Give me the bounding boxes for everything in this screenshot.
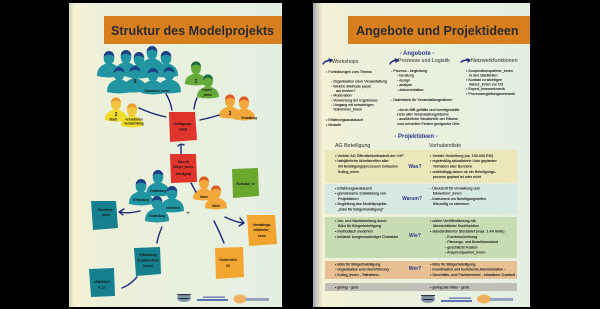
sticky note: Beteiligungsbeirat: beirat (179, 128, 187, 132)
logos (421, 294, 513, 304)
column: Workshops: - Welche Methode passt (331, 84, 371, 88)
column: Workshops (323, 59, 387, 127)
group: teal people at the Büro: Einbindung (150, 189, 166, 193)
sticky note: Einwohner_innen: Einwohner (97, 208, 113, 212)
sticky note: Evaluator_in (232, 168, 259, 198)
sticky note: Verwaltungsmitarbeiter_innen: Verwaltungs- (253, 223, 271, 227)
row: Wie: • Vor- und Nachbereitung durch (335, 219, 387, 223)
title banner: Struktur des Modelprojekts: Struktur des Modelprojekts (111, 24, 274, 38)
panel: Struktur des Modelprojekts poster (69, 3, 282, 307)
group: Stadt und Verwaltung yellow people: versammlung (124, 122, 144, 126)
row: Warum: frühzeitig zu erkennen (433, 202, 469, 206)
row: Warum: „Büro für Bürgerbeteiligung" (338, 208, 384, 212)
sticky note: Büro für Bürger_innenbeteiligung: Büro für (178, 160, 190, 164)
panel: Angebote und Projektideen poster (313, 3, 530, 307)
group: Expert_innen people: _innen (201, 93, 212, 97)
row: Wer (325, 261, 518, 279)
column: Workshops: - Moderation (331, 94, 352, 98)
sticky note: Fachbereich 60: Fachbereich (219, 258, 237, 262)
column: Prozesse und Logistik: - ausführliche Steckbriefe der Räume (397, 117, 458, 121)
column: Netzwerkfunktionen: • Expert_innennetzwerk (466, 87, 505, 91)
group: Interne orange people: intern (212, 204, 220, 208)
sticky note: Steuerung Quartiersebene: Kulsch (143, 264, 153, 268)
row: Warum (325, 184, 517, 214)
row: Warum: - Instrument um Beteiligungsreflex (430, 197, 486, 201)
arrows between stickies (119, 183, 244, 288)
column: Prozesse und Logistik: Liste aller Veranstaltungsräume (397, 112, 449, 116)
column: Prozesse und Logistik: - Datenbank für Veranstaltungsräume (391, 98, 452, 102)
column heading: AG Beteiligung: AG Beteiligung (335, 143, 370, 149)
sticky note: Büro für Bürger_innenbeteiligung: beteiligung (176, 172, 191, 176)
group: Expert_innen people: Expert (202, 88, 212, 92)
row: Wie: • standardisierter Steckbrief (max. 1 A4 Seite) (430, 230, 504, 234)
group: Verwaltung orange people: Verwaltung (241, 116, 257, 120)
sticky note: Büro für Bürger_innenbeteiligung: Bürger_innen- (173, 165, 194, 169)
column: Prozesse und Logistik: - analyse (397, 83, 412, 87)
column: Netzwerkfunktionen: • Kooperationspartner_innen (466, 69, 513, 73)
group: Stadt und Verwaltung yellow people: verordneten (125, 118, 143, 122)
column: Workshops: - Umgang mit schwierigen (331, 103, 374, 107)
row: Warum: - Übersicht für Verwaltung und (430, 186, 480, 190)
sticky note: Verwaltungsmitarbeiter_innen: mitarbeiter_ (254, 228, 271, 232)
row: Was: • Vorbild: Heidelberg (ca. 150.000 EW) (430, 154, 493, 158)
column: Netzwerkfunktionen: • Kontakt zu wichtigen (466, 78, 502, 82)
row: Was (325, 150, 517, 183)
row: Was: • regelmäßig aktualisierte Liste geplanter (430, 159, 497, 163)
sticky note: Fachbereich 60: 60 (226, 264, 230, 268)
column: Prozesse und Logistik: zum schnellen Finden geeigneter Orte (397, 122, 460, 126)
logos (177, 294, 269, 304)
group: teal people at the Büro: Einbindung (149, 214, 165, 218)
sticky note: Verwaltungsmitarbeiter_innen (247, 215, 277, 246)
column: Workshops: Workshops (332, 59, 359, 65)
row: Wer: • Büro für Bürgerbeteiligung (335, 262, 380, 266)
row: Wie: • methodisch moderiert (335, 230, 373, 234)
row: Wie: Büro für Bürgerbeteiligung (338, 224, 381, 228)
column: Workshops: am besten? (336, 89, 355, 93)
sticky note: Beteiligungsbeirat: Beteiligungs- (174, 122, 192, 126)
column: Workshops: • Fortbildungen zum Thema: (326, 70, 372, 74)
group: Expert_innen people (185, 61, 219, 98)
row: Warum: • gemeinsame Entwicklung von (335, 192, 386, 196)
group: Stadt und Verwaltung yellow people: Stadt (109, 118, 117, 122)
column: Netzwerkfunktionen: • Prozessbegleitungsnetzwerk (466, 92, 515, 96)
row: Warum: Einwohner_innen (433, 192, 462, 196)
column: Prozesse und Logistik: - design (397, 78, 410, 82)
group: teal people at the Büro (129, 170, 184, 222)
row: Was: • unabhängig davon ob ein Beteiligungs- (430, 170, 497, 174)
column: Prozesse und Logistik: - beratung (397, 74, 414, 78)
row: Wer: • Geschäfts- und Fachbereiche - inhaltliche Zuarbeit - (430, 273, 518, 277)
column: Netzwerkfunktionen (461, 58, 518, 96)
sticky note: Mittelfrist: 4, 12 (98, 286, 106, 290)
row: Aufwand: • gering - groß (335, 286, 359, 290)
row: Was: prozess geplant ist oder nicht (433, 175, 481, 179)
row: Aufwand (325, 283, 517, 291)
group: Interne orange people: intern (200, 195, 208, 199)
sticky note: Mittelfrist (89, 268, 115, 297)
group: Verwaltung orange people (219, 94, 257, 120)
group: Einwohner_innen people: Einwohner_innen (145, 89, 170, 93)
sticky note: Einwohner_innen (91, 201, 118, 230)
row: Wer: • Büro für Bürgerbeteiligung (430, 262, 475, 266)
sticky note: Evaluator_in: Evaluator_in (237, 182, 255, 186)
sticky note: Einwohner_innen: _innen (99, 213, 110, 217)
column: Workshops: Teilnehmer_innen (333, 108, 362, 112)
column heading: Vorhabenliste: Vorhabenliste (429, 143, 461, 149)
sticky note: Verwaltungsmitarbeiter_innen: innen (258, 234, 266, 238)
column: Workshops: • Erfahrungsaustausch (326, 118, 363, 122)
heading: Angebote: - Angebote - (400, 51, 434, 57)
row: Was: Was? (408, 164, 422, 170)
row: Wie: • online Veröffentlichung mit (430, 219, 476, 223)
row: Aufwand: • gering bis mittel - groß (430, 286, 470, 290)
group: Interne orange people (193, 176, 227, 210)
column: Workshops: - Verwertung der Ergebnisse (331, 98, 378, 102)
sticky note: Steuerung Quartiersebene: Quartiersebene (137, 258, 159, 262)
column: Prozesse und Logistik: - dokumentation (397, 88, 423, 92)
row: Wer: - Organisation und Durchführung - (335, 268, 392, 272)
row: Wie: - Kurzbeschreibung (445, 235, 477, 239)
row: Was: Kolleg_innen (338, 170, 359, 174)
row: Wie: übersichtlicher Suchfunktion (433, 224, 479, 228)
column: Netzwerkfunktionen: Akteur_innen vor Ort (469, 82, 503, 86)
connector lines to Beirat (139, 94, 219, 154)
column: Prozesse und Logistik: - durch BfB gefüllte und bereitgestellte (397, 108, 460, 112)
group: teal people at the Büro: Einbindung (133, 198, 149, 202)
row: Was: • Vorbild: AG Öffentlichkeitsarbeit der LHP (335, 154, 404, 158)
row: Was: • halbjährliche Arbeitstreffen aller (335, 159, 389, 163)
row: Warum: Warum? (402, 196, 422, 202)
row: Wer: Wer? (409, 266, 421, 272)
title banner: Angebote und Projektideen (348, 16, 530, 44)
row: Wie: - Ansprechpartner_innen (445, 250, 485, 254)
title banner: Angebote und Projektideen: Angebote und Projektideen (356, 24, 519, 38)
sticky note: Steuerung Quartiersebene: Entwicklung (139, 253, 157, 257)
row: Warum: • Begleitung des Modellprojekts (335, 202, 387, 206)
group: Einwohner_innen people (97, 46, 181, 94)
group: Stadt und Verwaltung yellow people: 2 (115, 112, 118, 118)
row: Wie: - Planungs- und Beschlussstand (445, 240, 498, 244)
row: Wie: - geschätzte Kosten (445, 246, 478, 250)
heading: Projektideen: - Projektideen - (394, 134, 438, 140)
row: Warum: Projektideen (338, 197, 358, 201)
column: Workshops: • Bedarfe (326, 123, 341, 127)
row: Was: mit Beteiligungsprozessen befassten (338, 164, 398, 168)
group: teal people at the Büro: Informiert (166, 206, 180, 210)
group: Verwaltung orange people: 2 (229, 111, 232, 117)
column: Netzwerkfunktionen: in den Stadtteilen (469, 74, 498, 78)
sticky note: Beteiligungsbeirat (169, 112, 197, 142)
column: Netzwerkfunktionen: Netzwerkfunktionen (471, 58, 518, 64)
plus sign: + (186, 211, 190, 217)
group: Expert_innen people: 2 (195, 79, 198, 85)
sticky note: Mittelfrist: Mittelfrisch (94, 280, 110, 284)
column: Prozesse und Logistik (390, 58, 460, 126)
column: Prozesse und Logistik: - Prozess - begleitung (391, 69, 427, 73)
row: Wie: • bedarat: kongresswürdiger Charakter (335, 235, 399, 239)
row: Wer: - Koordination und technische Administration - (430, 268, 506, 272)
row: Wer: • Kolleg_innen - Teilnahme - (335, 273, 382, 277)
row: Wie: Wie? (409, 233, 421, 239)
group: Stadt und Verwaltung yellow people (105, 97, 144, 128)
row: Wie (325, 217, 517, 258)
title banner: Struktur des Modelprojekts (104, 16, 282, 44)
row: Warum: • Erfahrungsaustausch (335, 186, 372, 190)
column: Prozesse und Logistik: Prozesse und Logistik (398, 58, 450, 64)
column: Workshops: - Organisation einer Veranstaltung (331, 80, 387, 84)
sticky note: Steuerung Quartiersebene (134, 247, 161, 276)
sticky note: Büro für Bürger_innenbeteiligung (170, 154, 197, 183)
row: Was: Vorhaben aller Bereiche (433, 164, 472, 168)
group: Einwohner_innen people: 9 (134, 79, 137, 85)
sticky note: Fachbereich 60 (215, 247, 244, 279)
